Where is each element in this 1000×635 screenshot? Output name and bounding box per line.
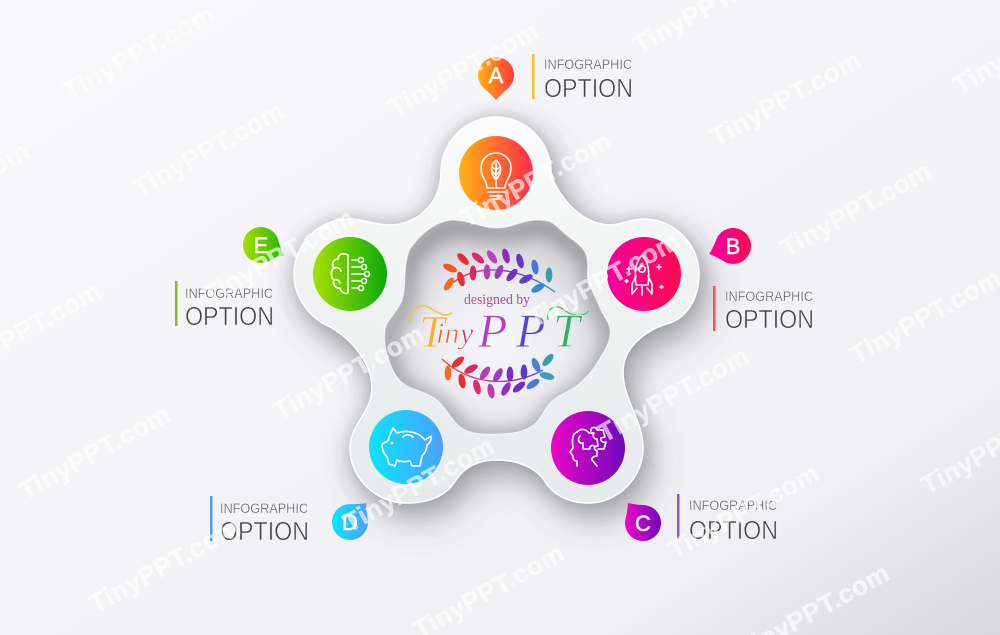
text E: OPTION xyxy=(185,301,274,331)
icon: puzzle head xyxy=(570,427,606,466)
text E: INFOGRAPHIC xyxy=(185,286,273,301)
ring outer shape xyxy=(294,117,699,503)
TinyPPT script: T xyxy=(419,306,448,357)
node C circle with puzzle head icon xyxy=(551,411,625,485)
pin E: E xyxy=(254,233,268,258)
text B: INFOGRAPHIC xyxy=(725,289,813,304)
icon: brain circuit xyxy=(331,254,370,293)
watermarks: TinyPPT.com xyxy=(84,511,245,619)
watermarks: TinyPPT.com xyxy=(523,225,684,333)
text C xyxy=(689,498,778,545)
pin D: D xyxy=(342,510,358,535)
ring inner hole xyxy=(385,220,613,441)
watermarks: TinyPPT.com xyxy=(455,125,616,233)
watermarks: TinyPPT.com xyxy=(338,430,499,538)
pin B: B xyxy=(726,234,740,259)
pin C: C xyxy=(635,511,651,536)
watermarks: TinyPPT.com xyxy=(198,202,359,310)
text B xyxy=(725,289,814,334)
designed by: designed by xyxy=(464,292,531,308)
text A xyxy=(544,57,633,103)
TinyPPT script: P xyxy=(477,305,507,358)
TinyPPT script: T xyxy=(553,305,583,358)
divider A xyxy=(532,54,534,99)
divider B xyxy=(713,286,716,331)
TinyPPT script: in xyxy=(436,317,459,350)
watermarks: TinyPPT.com xyxy=(705,44,866,152)
watermarks: TinyPPT.com xyxy=(14,398,175,506)
watermarks: TinyPPT.com xyxy=(128,95,289,203)
text D: INFOGRAPHIC xyxy=(220,501,308,516)
center logo xyxy=(411,248,589,399)
text E xyxy=(185,286,274,331)
text C: INFOGRAPHIC xyxy=(689,498,777,513)
TinyPPT script: y xyxy=(457,317,474,350)
pin C xyxy=(614,492,668,548)
node D circle with piggy icon xyxy=(369,410,443,484)
divider C xyxy=(677,494,680,539)
node A circle with bulb icon xyxy=(459,136,533,210)
pin A xyxy=(478,57,514,100)
node E circle with brain icon xyxy=(313,237,387,311)
divider E xyxy=(175,281,178,326)
pentagon ring panel xyxy=(294,117,699,503)
text B: OPTION xyxy=(725,304,814,334)
pin A: A xyxy=(489,63,504,88)
label A xyxy=(478,54,633,103)
watermarks: TinyPPT.com xyxy=(58,0,219,106)
text C: OPTION xyxy=(689,515,778,545)
pin D xyxy=(325,491,380,547)
bottom wreath xyxy=(442,352,555,399)
node B circle with rocket icon xyxy=(607,237,681,311)
icon: light bulb xyxy=(481,153,511,199)
divider D xyxy=(210,496,212,541)
icon: piggy bank xyxy=(382,428,431,466)
text A: OPTION xyxy=(544,73,633,103)
icon: rocket xyxy=(625,255,663,295)
label B xyxy=(704,223,814,334)
watermarks: TinyPPT.com xyxy=(663,457,824,565)
text D: OPTION xyxy=(220,516,309,546)
top wreath xyxy=(442,248,555,295)
watermarks: TinyPPT.com xyxy=(268,318,429,426)
text A: INFOGRAPHIC xyxy=(544,57,632,72)
watermarks: TinyPPT.com xyxy=(383,15,544,123)
watermarks: TinyPPT.com xyxy=(775,155,936,263)
TinyPPT script: P xyxy=(515,305,545,358)
label C xyxy=(614,492,778,548)
text D xyxy=(220,501,309,546)
TinyPPT script xyxy=(411,305,589,358)
watermarks: TinyPPT.com xyxy=(593,340,754,448)
label E xyxy=(175,221,291,331)
label D xyxy=(210,491,380,547)
